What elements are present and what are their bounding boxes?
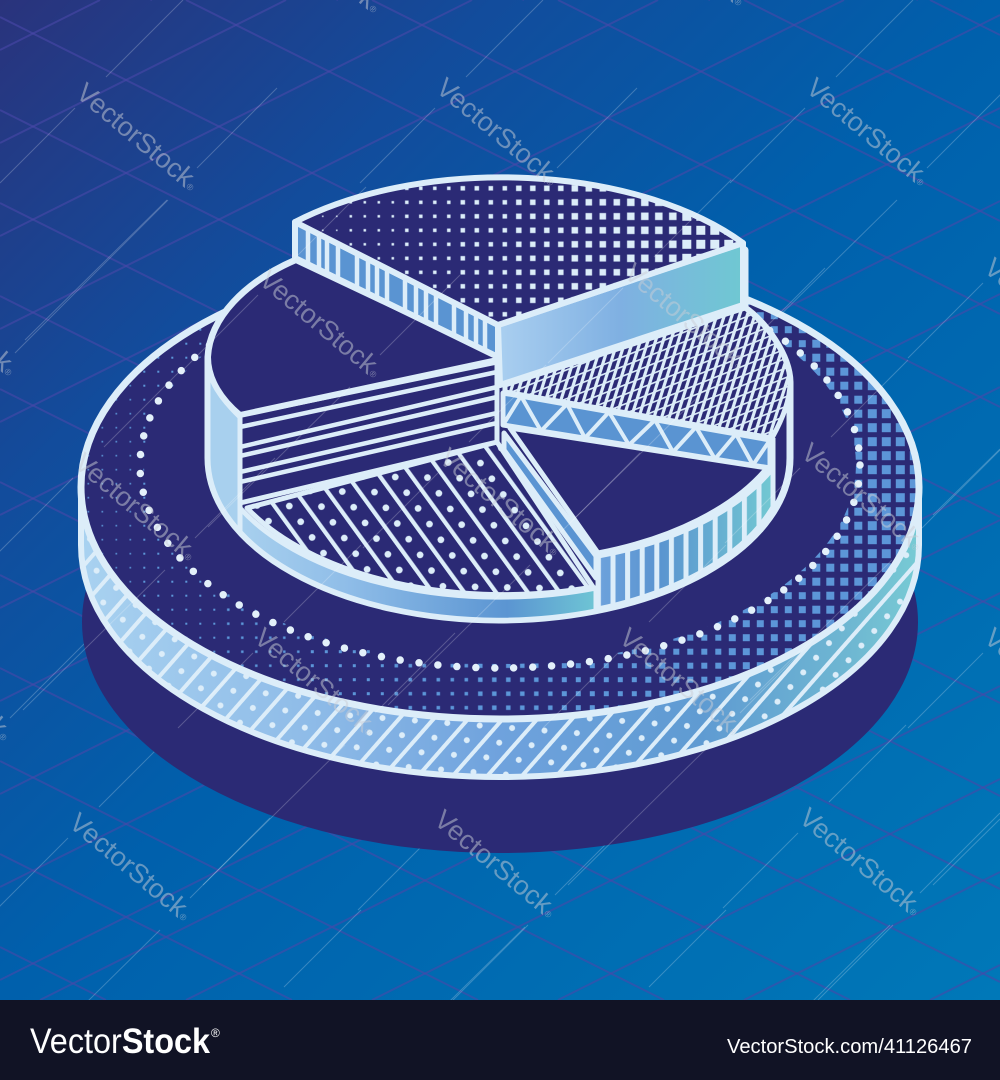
- VectorStock watermarks: ®: [184, 181, 196, 193]
- VectorStock watermarks: VectorStock: [71, 77, 200, 193]
- slice: plain navy left: [208, 260, 497, 415]
- triangle pattern face: [503, 393, 770, 468]
- right rim with vertical stripes: [598, 468, 773, 609]
- VectorStock watermarks: VectorStock: [796, 437, 925, 553]
- VectorStock watermarks: ®: [182, 551, 194, 563]
- blue side strip: [504, 433, 596, 578]
- VectorStock watermarks: VectorStock: [429, 804, 558, 920]
- VectorStock watermarks: VectorStock: [801, 72, 930, 188]
- raised slice right face: [498, 243, 743, 385]
- halftone square pattern: [87, 304, 916, 710]
- VectorStock watermarks: ®: [907, 906, 919, 918]
- base platform: [78, 296, 922, 780]
- VectorStock watermarks: ®: [177, 911, 189, 923]
- footer image id: VectorStock.com/41126467: [727, 1036, 972, 1058]
- slice: striped and dotted: [247, 442, 593, 595]
- gradient bottom band: [240, 508, 596, 620]
- VectorStock watermarks: VectorStock: [434, 442, 563, 558]
- raised slice top with halftone: [292, 174, 746, 327]
- VectorStock watermarks: VectorStock: [431, 72, 560, 188]
- VectorStock watermarks: VectorStock: [249, 622, 378, 738]
- VectorStock watermarks: ®: [367, 3, 379, 15]
- VectorStock watermarks: ®: [732, 361, 744, 373]
- pie chart: [208, 170, 790, 620]
- horizontal stripes face: [240, 362, 497, 503]
- VectorStock watermarks: ®: [914, 176, 926, 188]
- platform top outline: [81, 255, 919, 719]
- platform rim with diagonal stripes and dots: [81, 487, 919, 777]
- raised slice left striped face: [292, 219, 496, 358]
- column divider at right: [770, 438, 776, 510]
- VectorStock watermarks: ®: [727, 726, 739, 738]
- VectorStock watermarks: VectorStock: [69, 447, 198, 563]
- VectorStock watermarks: ®: [542, 908, 554, 920]
- VectorStock watermarks: ®: [909, 541, 921, 553]
- VectorStock watermarks: ®: [547, 546, 559, 558]
- VectorStock watermarks: ®: [544, 176, 556, 188]
- VectorStock watermarks: VectorStock: [64, 807, 193, 923]
- VectorStock watermarks: ®: [367, 368, 379, 380]
- dotted ring: [140, 262, 860, 668]
- drop shadow disc: [82, 391, 918, 853]
- VectorStock watermarks: ®: [362, 726, 374, 738]
- left outer side face: [208, 357, 240, 532]
- platform top surface: [81, 255, 919, 719]
- VectorStock watermarks: ®: [2, 366, 14, 378]
- slice: cross hatched: [505, 308, 790, 438]
- thin diagonal watermark lines over the artwork: [0, 180, 1000, 885]
- VectorStock watermarks: VectorStock: [614, 622, 743, 738]
- pie body silhouette: [208, 225, 790, 620]
- slice: plain navy right: [510, 428, 767, 553]
- VectorStock watermarks: VectorStock: [619, 257, 748, 373]
- VectorStock watermarks: VectorStock: [254, 264, 383, 380]
- registered mark: ®: [211, 1026, 220, 1040]
- footer bar: [0, 1000, 1000, 1080]
- raised slice: [292, 174, 746, 388]
- footer logo: VectorStock: [30, 1022, 210, 1061]
- VectorStock watermarks: VectorStock: [794, 802, 923, 918]
